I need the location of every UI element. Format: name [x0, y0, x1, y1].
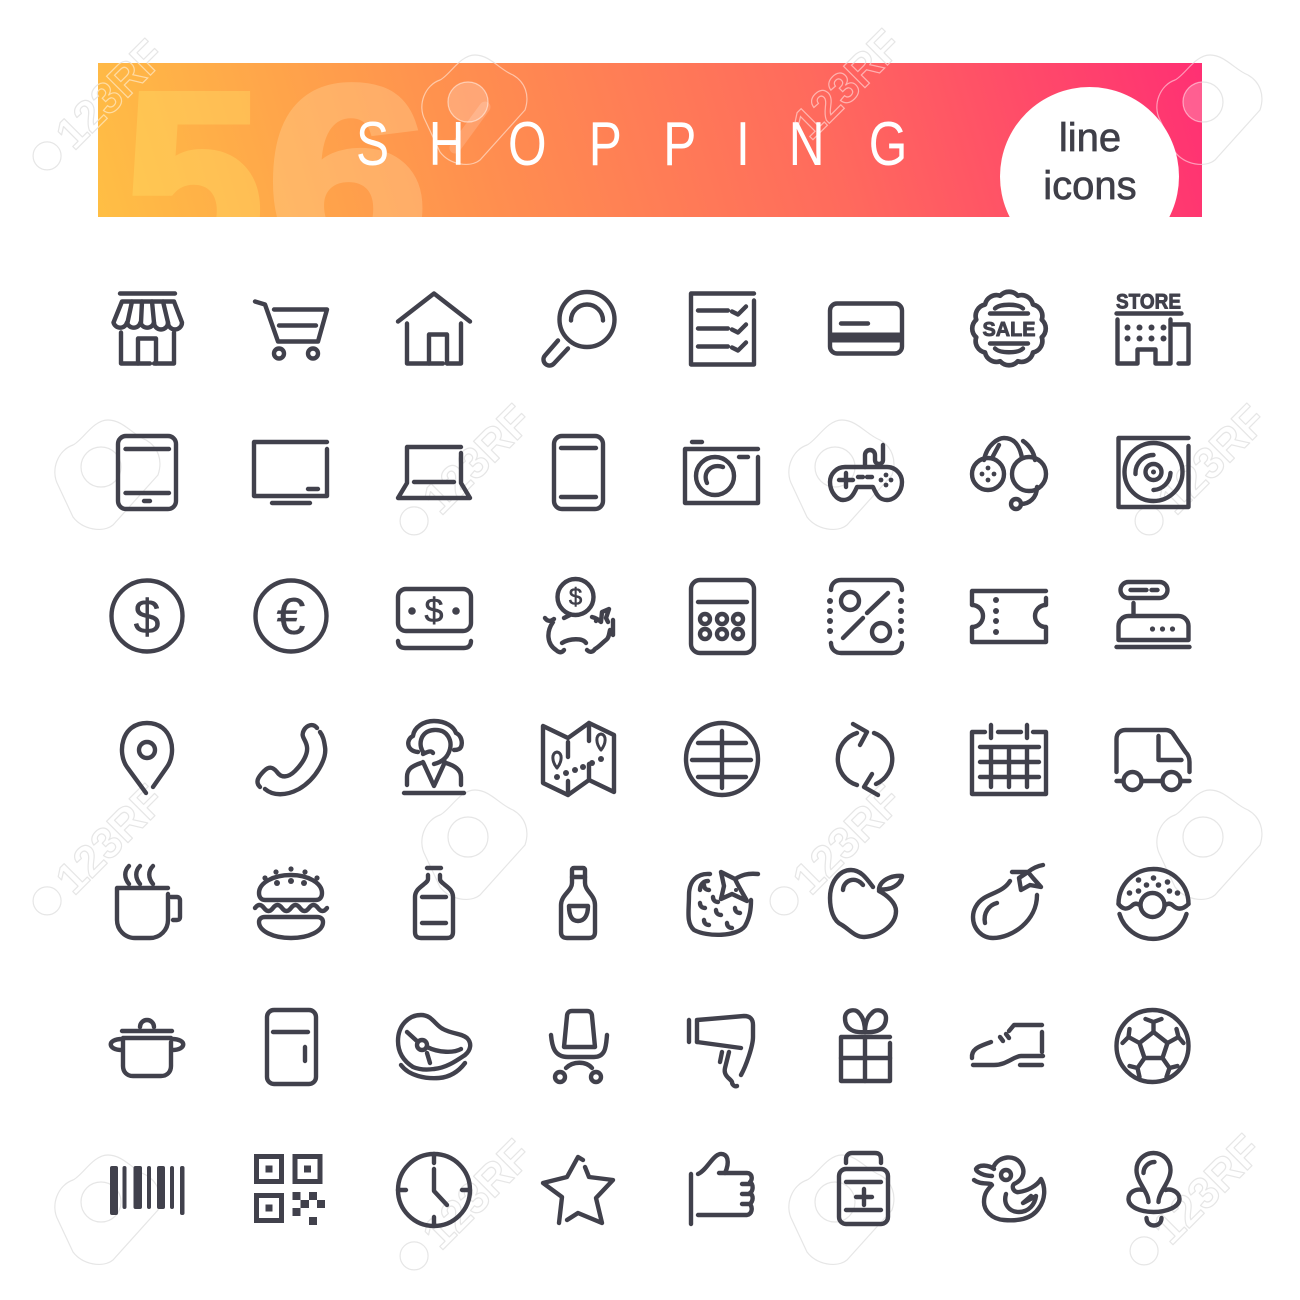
icon: thumbs up — [691, 1154, 753, 1224]
icon: vinyl record — [1118, 438, 1188, 507]
icon: coffee cup — [117, 866, 180, 938]
icon: phone handset — [257, 725, 325, 794]
icon: gift box — [841, 1010, 890, 1081]
icon: magnifier — [543, 292, 614, 366]
icon: eggplant — [973, 865, 1043, 938]
icon: calendar — [972, 725, 1046, 794]
icon: cash register scale — [1116, 582, 1190, 647]
icon: strawberry — [688, 872, 758, 935]
icon: shopping cart — [255, 302, 327, 358]
big number 56: 6 — [267, 34, 428, 321]
icon: steak — [398, 1015, 470, 1078]
icon: store building: STORE — [1116, 290, 1181, 314]
icon: calculator — [691, 580, 754, 653]
icon: star — [543, 1157, 613, 1223]
icon: credit card — [830, 304, 902, 354]
icon: smartphone — [554, 436, 603, 509]
icon: piggy bank: $ — [569, 584, 582, 611]
icon: burger — [255, 866, 327, 938]
icon: house — [398, 294, 470, 364]
icon: refrigerator — [267, 1010, 316, 1084]
icon: ketchup bottle — [561, 868, 595, 938]
icon: shoe — [972, 1025, 1043, 1065]
icon: delivery van — [1116, 730, 1190, 790]
icon: grid ball — [686, 723, 758, 795]
icon: barcode — [110, 1166, 184, 1215]
icon: game headset — [972, 438, 1046, 509]
icon: map pin — [122, 723, 172, 793]
icon: laptop — [398, 447, 470, 498]
icon: sale badge: SALE — [982, 319, 1036, 341]
badge: line icons — [1000, 87, 1179, 217]
icon: donut — [1118, 869, 1188, 939]
icon: support agent — [404, 721, 464, 793]
text: 123RF — [413, 1131, 541, 1259]
icon: piggy bank — [545, 579, 613, 652]
text: 123RF — [46, 31, 174, 159]
icon: sale badge — [972, 292, 1046, 365]
icon: store — [114, 294, 182, 364]
badge: line icons: icons — [1043, 164, 1137, 208]
icon: soccer ball — [1116, 1010, 1188, 1082]
icon: office chair — [551, 1011, 607, 1082]
icon: apple — [830, 870, 902, 937]
icon: QR code — [256, 1156, 325, 1225]
icon: store building — [1116, 290, 1188, 364]
icon: camera — [685, 442, 758, 503]
badge: line icons: line — [1059, 116, 1121, 160]
icon: percent coupon — [827, 580, 904, 653]
icon: game controller — [830, 445, 902, 500]
text: 123RF — [783, 21, 911, 149]
icon: euro coin — [256, 580, 326, 652]
icon: clock — [398, 1154, 470, 1226]
icon: euro coin: € — [277, 588, 306, 646]
big number 56: 5 — [124, 41, 263, 320]
icon: monitor — [254, 442, 327, 503]
header banner: 123RF — [46, 31, 174, 159]
text: 123RF — [413, 396, 541, 524]
title: SHOPPING — [356, 109, 907, 178]
icon: milk bottle — [415, 868, 453, 938]
header banner — [98, 63, 1202, 217]
icon: dollar coin — [112, 580, 182, 652]
icon: rubber duck — [974, 1157, 1044, 1220]
icon: dollar coin: $ — [134, 591, 160, 644]
icon: folded map — [543, 723, 614, 795]
icon: banknote: $ — [425, 592, 444, 630]
text: 123RF — [1143, 1126, 1271, 1254]
header banner: 123RF — [783, 21, 911, 149]
text: 123RF — [46, 776, 174, 904]
icon: ticket — [972, 591, 1046, 642]
icon: checklist — [691, 294, 754, 364]
icon: medicine jar — [839, 1153, 888, 1224]
icon: refresh arrows — [838, 724, 892, 795]
icon: cooking pot — [111, 1020, 183, 1076]
icon: banknote — [398, 589, 471, 648]
text: 123RF — [1148, 396, 1276, 524]
icon: tablet — [118, 436, 176, 509]
icon: pacifier — [1128, 1153, 1180, 1226]
icon: hair dryer — [689, 1016, 753, 1086]
big number 56 — [132, 82, 422, 217]
text: 123RF — [783, 776, 911, 904]
